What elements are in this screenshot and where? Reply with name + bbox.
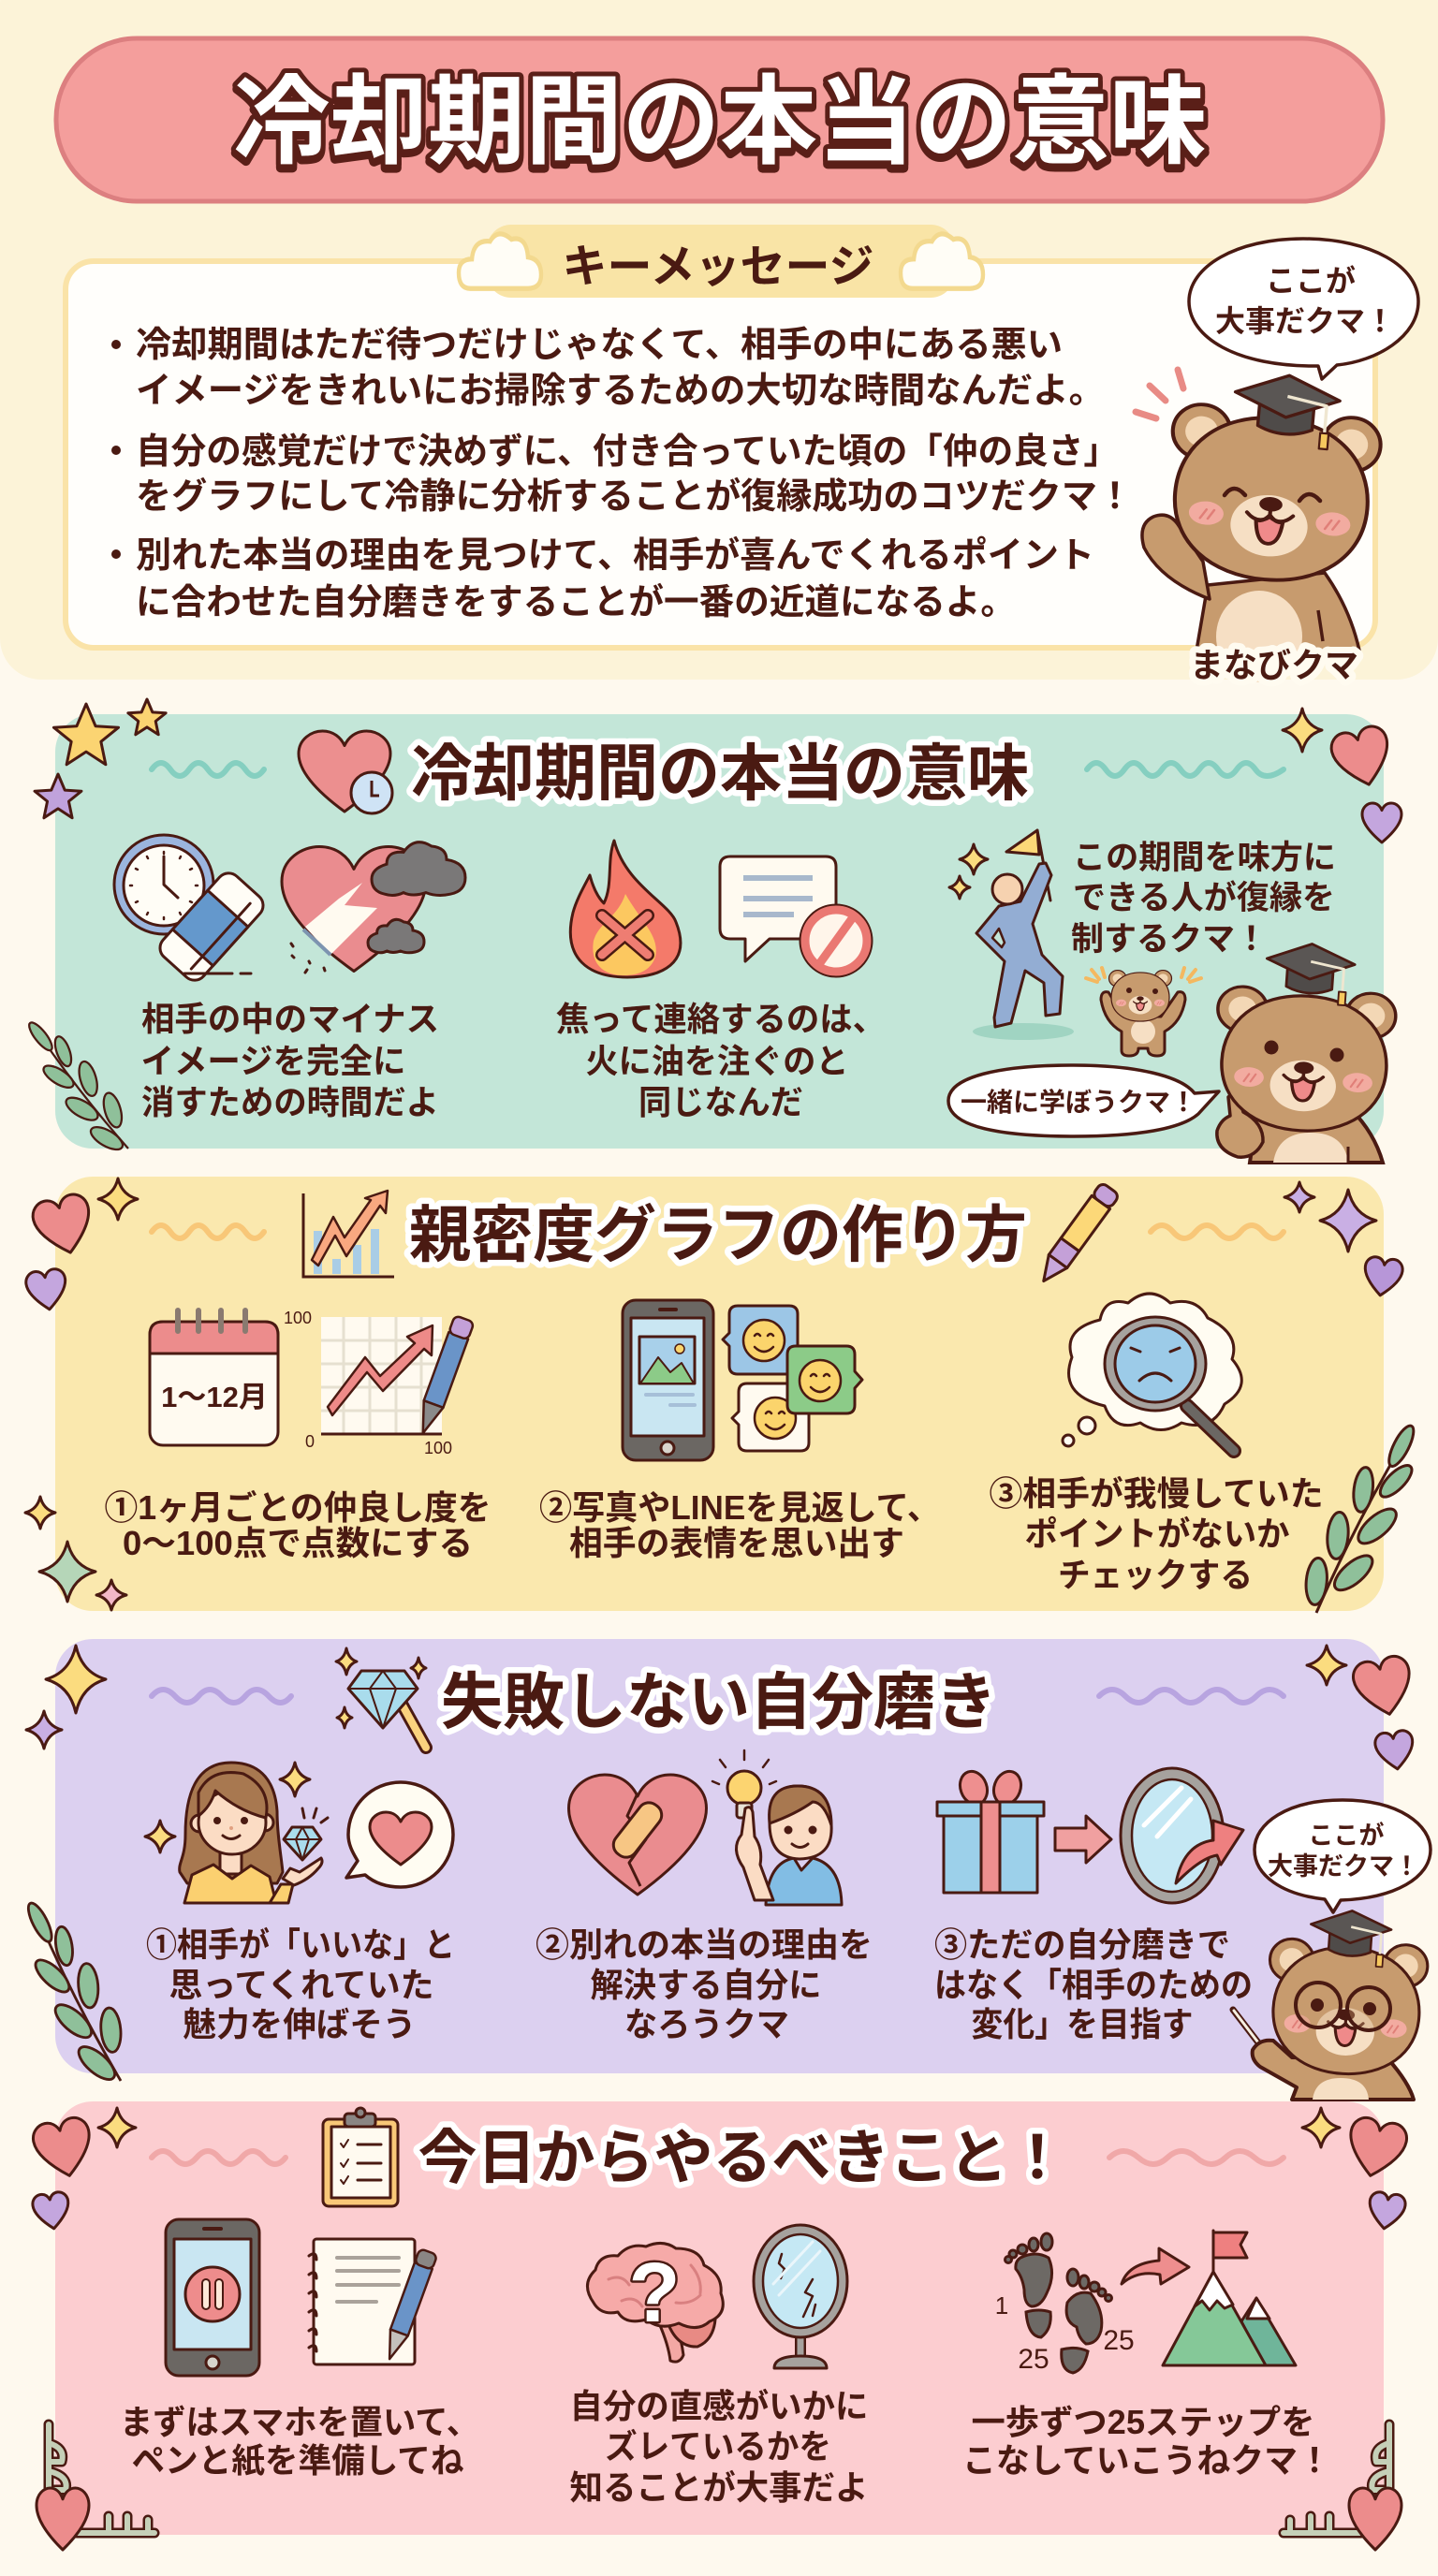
key message bullets: 自分の感覚だけで決めずに、付き合っていた頃の「仲の良さ」 (136, 432, 1119, 472)
decorations (9, 699, 1401, 1164)
key message bullets: に合わせた自分磨きをすることが一番の近道になるよ。 (136, 583, 1016, 622)
chart: intimacy line: 0 (305, 1432, 315, 1451)
bear body (1253, 2041, 1414, 2100)
decorations (1, 1646, 1417, 2096)
icon: diamond with magnifier handle (336, 1648, 426, 1748)
caption: 魅力を伸ばそう (183, 2005, 416, 2043)
top panel background (0, 0, 1438, 680)
corner ornaments (37, 2424, 1401, 2550)
caption: チェックする (1058, 1556, 1253, 1594)
glasses (1296, 1983, 1390, 2030)
icon: woman with diamond (145, 1763, 328, 1903)
icon: brain with question mark: ? (629, 2247, 680, 2340)
icon: clock and eraser (114, 835, 268, 986)
emphasis lines (1136, 370, 1183, 418)
caption (989, 1474, 1324, 1594)
caption (934, 1925, 1253, 2043)
caption: ①相手が「いいな」と (146, 1925, 455, 1964)
panel: self improvement (1, 1639, 1431, 2100)
bubble: let's learn (948, 1065, 1219, 1136)
speech bubble: ここが (1266, 264, 1356, 298)
caption: 変化」を目指す (972, 2005, 1193, 2043)
heading: 親密度グラフの作り方 (409, 1200, 1027, 1269)
caption: ①1ヶ月ごとの仲良し度を (105, 1488, 491, 1527)
bear body (1142, 515, 1359, 682)
panel: intimacy graph (24, 1177, 1438, 1628)
step numbers: 25 (1103, 2325, 1135, 2356)
icon: message bubble with prohibition (720, 856, 872, 976)
decorations (30, 2108, 1410, 2231)
key message bullets: をグラフにして冷静に分析することが復縁成功のコツだクマ！ (136, 477, 1133, 517)
icon: thought cloud with magnifier (1063, 1294, 1241, 1451)
bear name: まなびクマ (1190, 646, 1358, 684)
heading: 冷却期間の本当の意味 (411, 739, 1029, 808)
icon: footsteps (1005, 2233, 1112, 2373)
callout text (1071, 840, 1336, 958)
caption: 同じなんだ (638, 1083, 803, 1121)
step numbers: 1 (995, 2291, 1008, 2320)
caption (146, 1925, 455, 2043)
title: 冷却期間の本当の意味 (233, 68, 1207, 177)
chart: intimacy line: 100 (424, 1439, 452, 1457)
icon: calendar: 1〜12月 (161, 1381, 268, 1413)
caption: ②別れの本当の理由を (536, 1925, 873, 1964)
icon: person with flag (949, 830, 1074, 1040)
icon: clipboard (323, 2108, 398, 2206)
callout text: できる人が復縁を (1073, 880, 1335, 916)
icon: phone with pause (166, 2219, 259, 2376)
bear with glasses and bubble (1233, 1800, 1431, 2100)
decorations (24, 1178, 1438, 1628)
caption: まずはスマホを置いて、 (120, 2403, 479, 2441)
icon: chat bubbles with smileys (723, 1306, 862, 1451)
icon: bandaged broken heart (569, 1775, 706, 1895)
speech bubble: 大事だクマ！ (1268, 1852, 1419, 1881)
icon: phone with photo (623, 1300, 713, 1460)
icon: calendar (150, 1310, 278, 1445)
caption (556, 1000, 886, 1121)
caption: なろうクマ (624, 2005, 789, 2043)
icon: cracked mirror (754, 2225, 847, 2368)
icon: heart with clock (299, 731, 392, 813)
caption (962, 2403, 1331, 2480)
caption: イメージを完全に (140, 1042, 406, 1080)
speech bubble (1189, 239, 1418, 379)
icon: mirror with arrow (1121, 1768, 1243, 1903)
key message bullets: イメージをきれいにお掃除するための大切な時間なんだよ。 (136, 372, 1105, 411)
icon: notebook and pen (309, 2239, 437, 2364)
chart: intimacy line: 100 (284, 1309, 312, 1327)
key message label (459, 225, 983, 298)
icon: gift (937, 1767, 1044, 1893)
caption: ポイントがないか (1024, 1515, 1290, 1553)
small bear (1086, 968, 1201, 1056)
caption: 焦って連絡するのは、 (556, 1000, 886, 1038)
speech bubble: ここが (1309, 1821, 1384, 1850)
icon: pencil (1034, 1182, 1120, 1288)
icon: light bulb (712, 1750, 776, 1818)
caption: ペンと紙を準備してね (131, 2441, 464, 2480)
icon: heart being erased with clouds (282, 842, 465, 973)
caption: 自分の直感がいかに (569, 2387, 869, 2425)
caption (140, 1000, 439, 1121)
bubble: let's learn: 一緒に学ぼうクマ！ (961, 1088, 1196, 1117)
icon: flame with cross (570, 841, 681, 977)
caption: 相手の表情を思い出す (569, 1524, 904, 1562)
icon: brain with question mark (587, 2243, 723, 2362)
key message bullets: 別れた本当の理由を見つけて、相手が喜んでくれるポイント (136, 536, 1094, 576)
caption: ズレているかを (605, 2427, 831, 2466)
caption: 解決する自分に (590, 1966, 822, 2004)
key message label: キーメッセージ (562, 242, 874, 292)
speech bubble (1255, 1800, 1431, 1912)
caption: こなしていこうねクマ！ (962, 2441, 1331, 2480)
key message card (66, 225, 1375, 648)
callout text: 制するクマ！ (1071, 921, 1268, 958)
panel: what to do today (30, 2101, 1410, 2550)
key message bullets (111, 326, 1133, 622)
icon: mountain with flag (1163, 2231, 1296, 2365)
panel: cooling period meaning (9, 699, 1401, 1164)
caption: 思ってくれていた (169, 1966, 434, 2004)
caption: 火に油を注ぐのと (586, 1042, 848, 1080)
large bear with hat (1211, 941, 1397, 1163)
caption (120, 2403, 479, 2480)
title banner (56, 38, 1383, 201)
caption (536, 1925, 873, 2043)
arrow: footsteps to mountain (1122, 2248, 1189, 2284)
caption: はなく「相手のための (934, 1966, 1253, 2004)
heading: 失敗しない自分磨き (441, 1667, 997, 1736)
caption: 一歩ずつ25ステップを (972, 2403, 1314, 2441)
caption (569, 2387, 869, 2507)
callout text: この期間を味方に (1073, 840, 1336, 876)
caption (105, 1488, 491, 1562)
pointer (1233, 2010, 1264, 2050)
caption: ②写真やLINEを見返して、 (539, 1488, 940, 1527)
step numbers (995, 2291, 1135, 2375)
caption: 相手の中のマイナス (141, 1000, 439, 1038)
arrow: gift to mirror (1055, 1816, 1111, 1863)
icon: speech bubble with heart (346, 1782, 453, 1887)
heading: 今日からやるべきこと！ (418, 2126, 1067, 2191)
caption: 知ることが大事だよ (569, 2468, 869, 2507)
caption: ③ただの自分磨きで (934, 1925, 1230, 1964)
icon: boy pointing (736, 1786, 842, 1905)
icon: chart (303, 1191, 394, 1277)
bear mascot with speech bubble (1136, 239, 1418, 684)
caption (539, 1488, 940, 1562)
key message bullets: 冷却期間はただ待つだけじゃなくて、相手の中にある悪い (136, 326, 1063, 365)
caption: ③相手が我慢していた (989, 1474, 1324, 1513)
caption: 0〜100点で点数にする (123, 1524, 473, 1562)
speech bubble: 大事だクマ！ (1215, 304, 1395, 338)
chart: intimacy line (284, 1309, 475, 1457)
caption: 消すための時間だよ (141, 1083, 439, 1121)
step numbers: 25 (1018, 2344, 1049, 2375)
